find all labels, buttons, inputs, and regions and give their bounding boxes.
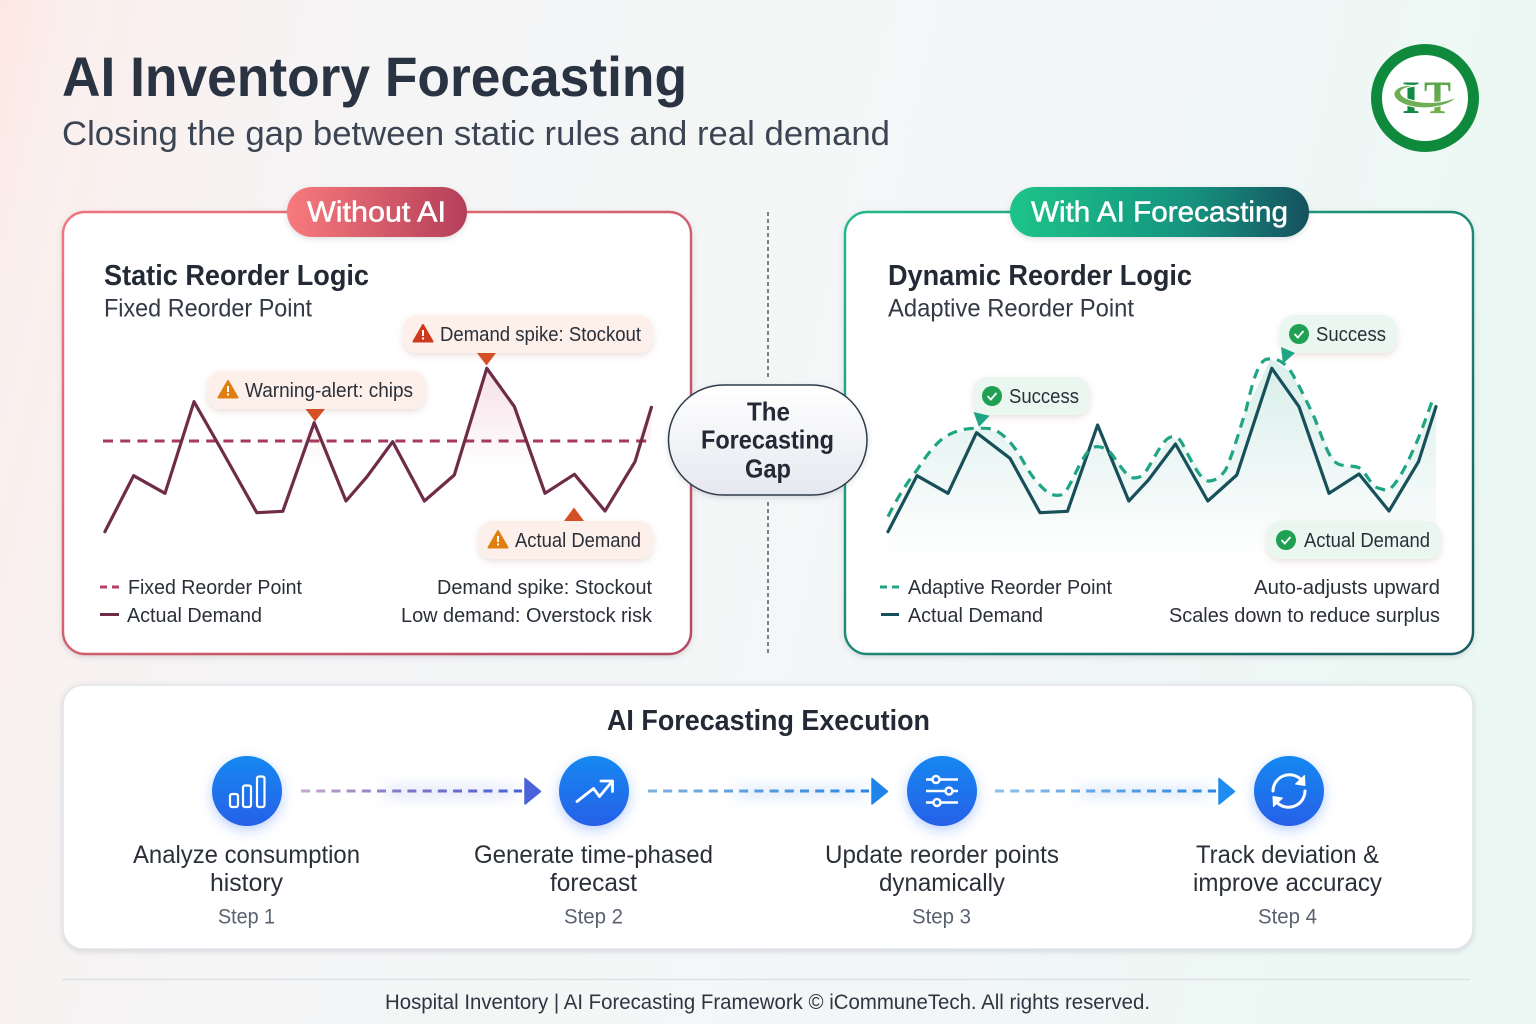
badge: With AI Forecasting xyxy=(1010,187,1309,237)
line chart: adaptive reorder point vs demand xyxy=(888,359,1436,560)
legend: left xyxy=(100,576,302,627)
legend: right xyxy=(880,576,1112,627)
subheading: Fixed Reorder Point xyxy=(104,294,312,322)
callout: the forecasting gap: Forecasting xyxy=(701,424,834,454)
callout: success right: Success xyxy=(1316,324,1386,346)
legend notes: left xyxy=(401,576,653,627)
step 2 label: forecast xyxy=(550,869,637,897)
badge: Without AI xyxy=(287,187,467,237)
icon: refresh xyxy=(1254,756,1324,826)
heading: execution: AI Forecasting Execution xyxy=(607,705,930,737)
callout: success right xyxy=(1280,315,1397,364)
step 3 label: dynamically xyxy=(879,869,1005,897)
arrow: step 1 to 2 xyxy=(301,778,540,804)
icon: sliders xyxy=(907,756,977,826)
heading: static reorder logic: Static Reorder Logic xyxy=(104,260,369,292)
panel: without AI xyxy=(63,187,691,654)
icon: trend up xyxy=(559,756,629,826)
legend notes: right: Auto-adjusts upward xyxy=(1254,576,1440,599)
line chart: fixed reorder point vs demand xyxy=(103,368,653,532)
arrow: step 3 to 4 xyxy=(995,778,1234,804)
step 1 label xyxy=(133,841,360,928)
step 4 label xyxy=(1193,841,1382,928)
logo: IT badge xyxy=(1376,50,1474,146)
callout: the forecasting gap: Gap xyxy=(745,454,791,484)
legend: left: Actual Demand xyxy=(127,604,262,627)
callout: actual demand xyxy=(478,508,653,559)
step 4 label: improve accuracy xyxy=(1193,869,1382,897)
step 1 label: history xyxy=(210,869,283,897)
step 4 label: Track deviation & xyxy=(1196,841,1379,869)
callout: warning alert chips: Warning-alert: chips xyxy=(245,380,413,402)
panel frame xyxy=(63,685,1473,949)
step 1 label: Analyze consumption xyxy=(133,841,360,869)
step 1 label: Step 1 xyxy=(218,906,275,928)
legend notes: left: Low demand: Overstock risk xyxy=(401,604,653,627)
panel: with AI forecasting xyxy=(845,187,1473,654)
step 1 xyxy=(133,756,360,928)
legend notes: right xyxy=(1169,576,1440,627)
step 3 label: Step 3 xyxy=(912,906,971,928)
step 3 label: Update reorder points xyxy=(825,841,1059,869)
logo: IT badge: T xyxy=(1424,72,1451,124)
legend: right: Actual Demand xyxy=(908,604,1043,627)
callout: success left: Success xyxy=(1009,386,1079,408)
logo: IT badge: I xyxy=(1402,72,1420,124)
callout: the forecasting gap: The xyxy=(747,396,790,426)
step 2 label xyxy=(474,841,713,928)
callout: demand spike stockout: Demand spike: Stockout xyxy=(440,324,641,346)
step 2 xyxy=(474,756,713,928)
callout: actual demand xyxy=(1267,521,1441,559)
badge: Without AI: Without AI xyxy=(307,196,446,228)
callout: success left xyxy=(973,377,1090,427)
legend notes: left: Demand spike: Stockout xyxy=(437,576,652,599)
step 2 label: Step 2 xyxy=(564,906,623,928)
arrow: step 2 to 3 xyxy=(648,778,888,804)
subtitle: Closing the gap between static rules and real demand xyxy=(62,115,890,153)
panel: AI forecasting execution xyxy=(63,685,1473,949)
callout: demand spike stockout xyxy=(403,315,653,366)
step 3 label xyxy=(825,841,1059,928)
legend: left: Fixed Reorder Point xyxy=(128,576,302,599)
callout: actual demand: Actual Demand xyxy=(515,530,641,552)
callout: warning alert chips xyxy=(207,371,426,422)
footer: Hospital Inventory | AI Forecasting Framework © iCommuneTech. All rights reserved. xyxy=(385,991,1150,1014)
center divider xyxy=(767,212,769,655)
title: AI Inventory Forecasting xyxy=(62,45,687,108)
panel frame xyxy=(845,212,1473,654)
legend notes: right: Scales down to reduce surplus xyxy=(1169,604,1440,627)
step 2 label: Generate time-phased xyxy=(474,841,713,869)
callout: actual demand: Actual Demand xyxy=(1304,530,1430,552)
icon: bar chart xyxy=(212,756,282,826)
step 4 label: Step 4 xyxy=(1258,906,1317,928)
callout: the forecasting gap xyxy=(668,385,867,495)
heading: dynamic reorder logic: Dynamic Reorder Logic xyxy=(888,260,1192,292)
panel frame xyxy=(63,212,691,654)
step 4 xyxy=(1193,756,1382,928)
subheading: Adaptive Reorder Point xyxy=(888,294,1134,322)
badge: With AI Forecasting: With AI Forecasting xyxy=(1031,196,1288,228)
legend: right: Adaptive Reorder Point xyxy=(908,576,1112,599)
step 3 xyxy=(825,756,1059,928)
